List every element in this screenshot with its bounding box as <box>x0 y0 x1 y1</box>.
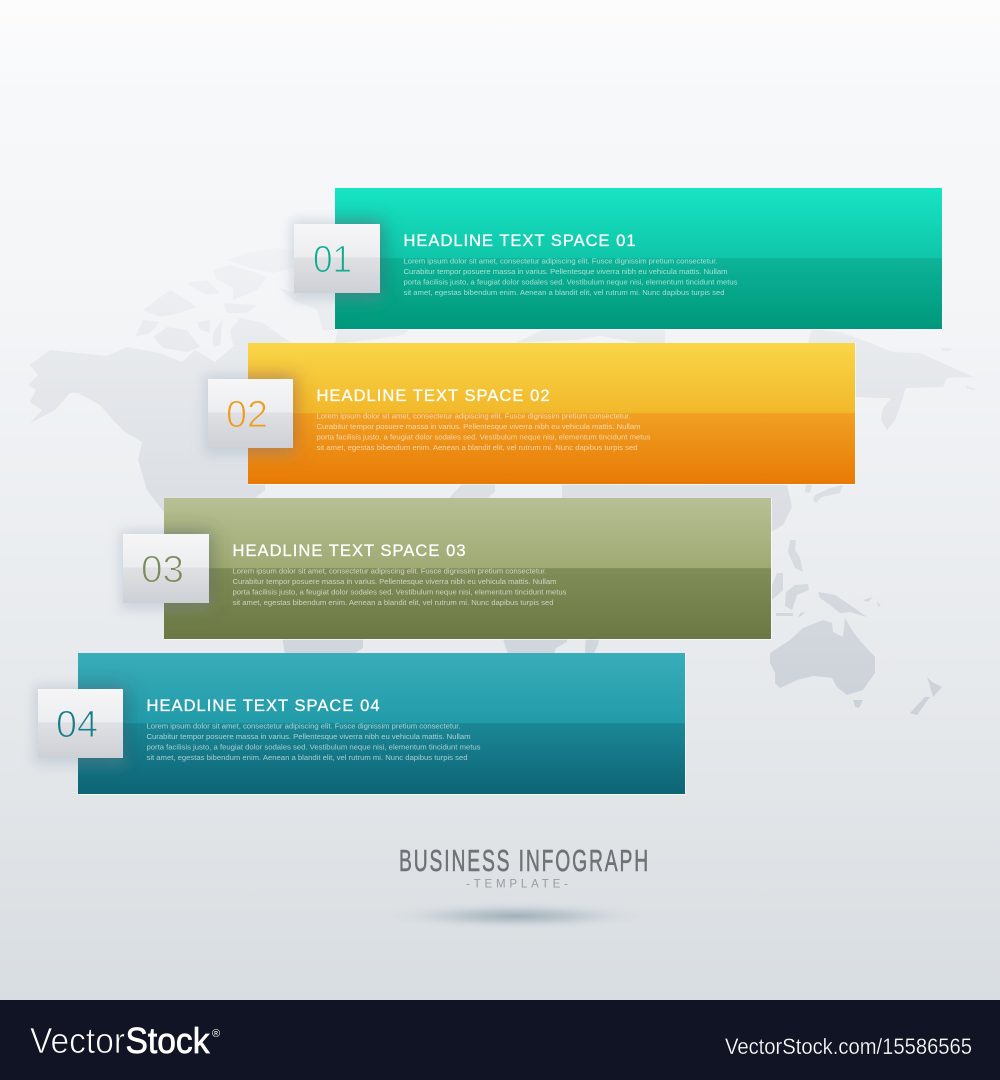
banner 03 <box>120 498 772 640</box>
title: BUSINESS INFOGRAPH <box>399 843 650 878</box>
image id: VectorStock.com/15586565 <box>725 1034 972 1059</box>
banner 02: Curabitur tempor posuere massa in varius. Pellentesque viverra nibh eu vehicula mattis. Nullam <box>316 422 640 431</box>
banner 03: Lorem ipsum dolor sit amet, consectetur adipiscing elit. Fusce dignissim pretium consectetur. <box>232 566 546 576</box>
floating shadow <box>366 901 666 931</box>
banner 04: sit amet, egestas bibendum enim. Aenean a blandit elit, vel rutrum mi. Nunc dapibus turpis sed <box>146 753 468 762</box>
banner 03: 03 <box>141 549 184 591</box>
footer bar <box>0 1000 1000 1080</box>
banner 01: HEADLINE TEXT SPACE 01 <box>404 232 636 250</box>
banner 03: Curabitur tempor posuere massa in varius. Pellentesque viverra nibh eu vehicula mattis. Nullam <box>232 577 556 586</box>
banner 02: sit amet, egestas bibendum enim. Aenean a blandit elit, vel rutrum mi. Nunc dapibus turpis sed <box>316 443 638 452</box>
banner 02: Lorem ipsum dolor sit amet, consectetur adipiscing elit. Fusce dignissim pretium consectetur. <box>316 412 630 420</box>
banner 01: Lorem ipsum dolor sit amet, consectetur adipiscing elit. Fusce dignissim pretium consectetur. <box>404 256 718 266</box>
banner 01: Curabitur tempor posuere massa in varius. Pellentesque viverra nibh eu vehicula mattis. Nullam <box>404 267 728 276</box>
logo: Stock <box>126 1020 210 1061</box>
logo: ® <box>212 1028 220 1040</box>
banner 02: porta facilisis justo, a feugiat dolor sodales sed. Vestibulum neque nisi, elementum tincidunt metus <box>316 432 651 442</box>
banner 02: HEADLINE TEXT SPACE 02 <box>316 387 550 405</box>
subtitle: -TEMPLATE- <box>466 878 568 890</box>
banner 03: HEADLINE TEXT SPACE 03 <box>232 542 466 560</box>
logo: Vector <box>30 1020 125 1061</box>
banner 01: sit amet, egestas bibendum enim. Aenean a blandit elit, vel rutrum mi. Nunc dapibus turpis sed <box>404 288 724 297</box>
banner 01: 01 <box>313 239 352 281</box>
banner 02 <box>204 343 856 485</box>
banner 02: 02 <box>226 394 268 436</box>
banner 04 <box>34 653 686 795</box>
banner 01: porta facilisis justo, a feugiat dolor sodales sed. Vestibulum neque nisi, elementum tincidunt metus <box>404 278 738 286</box>
banner 04: porta facilisis justo, a feugiat dolor sodales sed. Vestibulum neque nisi, elementum tincidunt metus <box>146 742 481 752</box>
banner 03: porta facilisis justo, a feugiat dolor sodales sed. Vestibulum neque nisi, elementum tincidunt metus <box>232 588 567 596</box>
banner 03: sit amet, egestas bibendum enim. Aenean a blandit elit, vel rutrum mi. Nunc dapibus turpis sed <box>232 598 554 607</box>
banner 04: Curabitur tempor posuere massa in varius. Pellentesque viverra nibh eu vehicula mattis. Nullam <box>146 732 470 741</box>
banner 04: Lorem ipsum dolor sit amet, consectetur adipiscing elit. Fusce dignissim pretium consectetur. <box>146 722 460 730</box>
banner 04: 04 <box>56 704 98 746</box>
world map <box>28 248 976 715</box>
banner 01 <box>291 188 943 330</box>
banner 04: HEADLINE TEXT SPACE 04 <box>146 697 380 715</box>
logo <box>30 1020 220 1061</box>
